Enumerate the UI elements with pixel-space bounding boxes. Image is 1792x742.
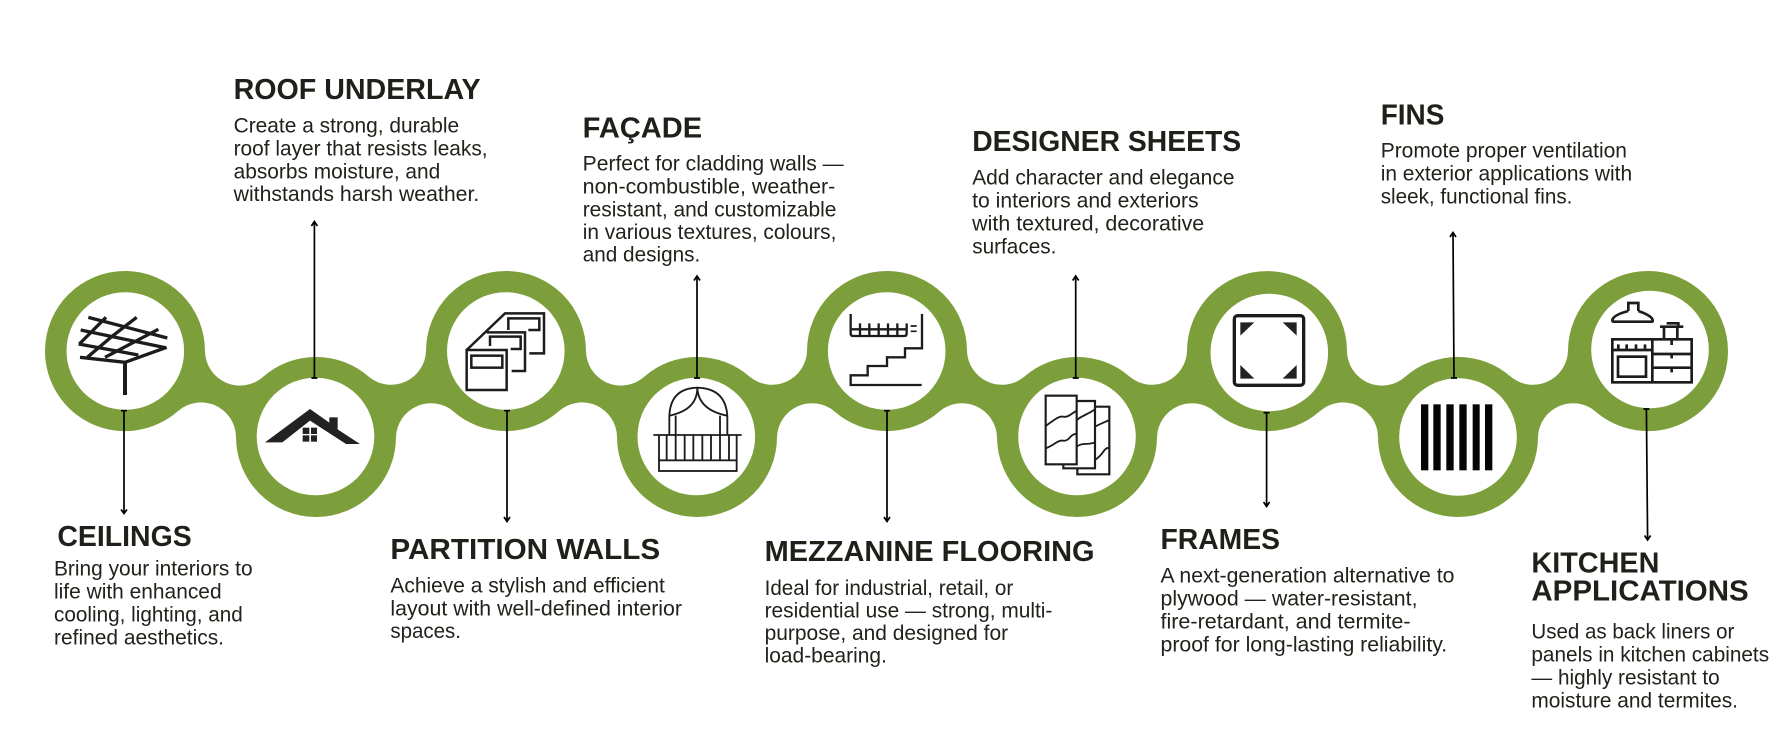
description: resistant, and customizable <box>583 198 836 221</box>
description: fire-retardant, and termite- <box>1160 611 1410 634</box>
description <box>1381 140 1632 209</box>
description: residential use — strong, multi- <box>765 599 1052 622</box>
description: moisture and termites. <box>1531 689 1738 712</box>
arrow: partition walls <box>504 411 510 522</box>
description <box>54 558 253 650</box>
description: spaces. <box>390 620 461 643</box>
description <box>390 575 682 643</box>
description: surfaces. <box>972 235 1056 258</box>
description: life with enhanced <box>54 581 222 604</box>
description <box>1160 565 1454 657</box>
arrow: mezzanine flooring <box>884 411 890 522</box>
heading: ROOF UNDERLAY <box>234 74 481 106</box>
heading <box>1531 548 1749 608</box>
heading: KITCHEN <box>1531 548 1659 580</box>
icon: house roof <box>265 409 360 444</box>
description <box>1531 621 1769 712</box>
white node discs <box>66 291 1709 496</box>
description <box>971 166 1234 258</box>
description: Add character and elegance <box>972 166 1234 189</box>
description: refined aesthetics. <box>54 627 224 650</box>
text block: ceilings <box>54 521 253 650</box>
arrow: ceilings <box>121 411 127 514</box>
text block: fins <box>1381 100 1632 209</box>
description: Promote proper ventilation <box>1381 140 1627 163</box>
description: Achieve a stylish and efficient <box>390 575 665 598</box>
text block: kitchen applications <box>1531 548 1769 712</box>
description: with textured, decorative <box>971 212 1204 235</box>
description: proof for long-lasting reliability. <box>1160 634 1447 657</box>
description: Bring your interiors to <box>54 558 253 581</box>
description: — highly resistant to <box>1531 667 1720 690</box>
icon: designer sheets <box>1046 396 1109 474</box>
text block: facade <box>583 112 844 267</box>
description: sleek, functional fins. <box>1381 186 1572 209</box>
heading: CEILINGS <box>57 521 192 553</box>
description: cooling, lighting, and <box>54 604 243 627</box>
description: withstands harsh weather. <box>233 183 479 206</box>
icon: ceiling grid <box>79 317 167 395</box>
text block: roof underlay <box>233 74 488 206</box>
icon: facade balcony <box>653 388 742 471</box>
heading: DESIGNER SHEETS <box>972 126 1241 158</box>
arrow: frames <box>1264 413 1270 506</box>
heading: FINS <box>1381 100 1444 132</box>
arrow: kitchen applications <box>1643 409 1651 540</box>
icon: fins bars <box>1421 404 1492 470</box>
description: and designs. <box>583 244 700 267</box>
heading: PARTITION WALLS <box>390 534 660 566</box>
description: layout with well-defined interior <box>390 597 682 620</box>
arrow: designer sheets <box>1073 276 1079 378</box>
description: Perfect for cladding walls — <box>583 153 844 176</box>
description: non-combustible, weather- <box>583 176 835 199</box>
wavy green ribbon connecting nine nodes <box>45 271 1728 517</box>
description: Used as back liners or <box>1531 621 1734 644</box>
description: load-bearing. <box>765 645 887 668</box>
heading: APPLICATIONS <box>1531 576 1749 608</box>
icon: frame square <box>1234 316 1304 385</box>
text block: partition walls <box>390 534 682 643</box>
text block: mezzanine flooring <box>765 536 1095 668</box>
heading: FAÇADE <box>583 112 702 144</box>
description: in various textures, colours, <box>583 221 836 244</box>
description: in exterior applications with <box>1381 163 1632 186</box>
arrow: facade <box>694 276 700 378</box>
description: absorbs moisture, and <box>234 160 440 183</box>
description: panels in kitchen cabinets <box>1531 644 1769 667</box>
heading: FRAMES <box>1160 524 1280 556</box>
icon: kitchen <box>1612 303 1692 382</box>
heading: MEZZANINE FLOORING <box>765 536 1095 568</box>
description: plywood — water-resistant, <box>1160 588 1418 611</box>
description: purpose, and designed for <box>765 622 1008 645</box>
description <box>583 153 844 267</box>
text block: frames <box>1160 524 1454 657</box>
description: to interiors and exteriors <box>972 190 1199 213</box>
description: roof layer that resists leaks, <box>234 138 488 161</box>
icon: partition panels <box>467 313 544 390</box>
description <box>233 115 488 206</box>
arrow: roof underlay <box>311 222 317 378</box>
description: Ideal for industrial, retail, or <box>765 577 1013 600</box>
icon: mezzanine stairs <box>851 314 922 385</box>
description: Create a strong, durable <box>234 115 459 138</box>
description <box>765 577 1052 668</box>
arrow: fins <box>1450 232 1457 378</box>
text block: designer sheets <box>971 126 1241 258</box>
description: A next-generation alternative to <box>1160 565 1454 588</box>
